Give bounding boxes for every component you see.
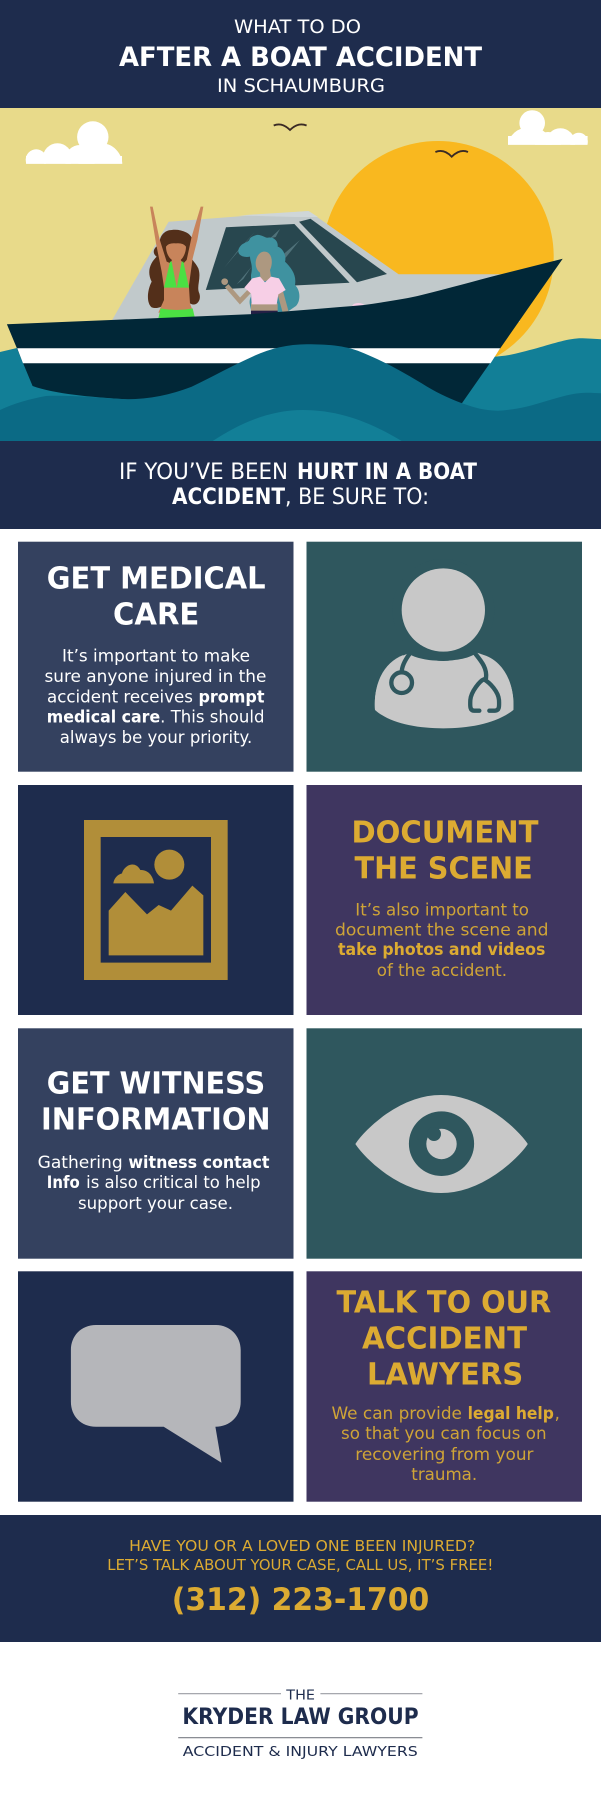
heading: get medical care: GET MEDICAL [47,561,266,596]
icon: speech bubble [71,1325,241,1463]
heading: document the scene: DOCUMENT [352,816,539,851]
text: lawyers body: trauma. [411,1465,477,1484]
text: witness body: witness contact [128,1153,270,1172]
heading: get witness information: GET WITNESS [47,1066,265,1101]
text: medical care body: prompt [198,687,265,706]
text: document body: take photos and videos [338,940,545,959]
bottom wave [213,410,402,441]
icon: eye [356,1096,527,1192]
title banner: IN SCHAUMBURG [217,76,385,97]
panel: eye icon [306,1028,582,1259]
heading: talk to our accident lawyers: TALK TO OUR [336,1285,551,1320]
section heading: IF YOU’VE BEEN [119,460,288,485]
text: witness body: support your case. [78,1194,233,1213]
boat cabin [111,211,520,322]
heading: get medical care: CARE [113,597,199,632]
text: witness body [38,1153,270,1213]
logo: the kryder law group: THE [285,1687,315,1703]
title banner: WHAT TO DO [234,17,361,38]
text: medical care body: medical care [47,708,160,727]
panel: document the scene [306,785,582,1015]
text: lawyers body: We can provide [332,1404,462,1423]
panel: get witness information [18,1028,294,1259]
section heading: ACCIDENT [172,485,285,510]
heading: get witness information [41,1066,271,1137]
heading: talk to our accident lawyers [336,1285,551,1392]
panel: doctor icon [306,542,582,772]
heading: document the scene: THE SCENE [354,852,533,887]
heading: document the scene [352,816,539,887]
section heading: HURT IN A BOAT [297,460,477,485]
heading: get witness information: INFORMATION [41,1102,271,1137]
logo: the kryder law group: KRYDER LAW GROUP [182,1705,419,1730]
hull white stripe [17,348,500,363]
text: document body: document the scene and [335,920,548,939]
text: medical care body: sure anyone injured in the [44,667,266,686]
text: lawyers body [332,1404,560,1484]
icon: bird right [435,151,468,157]
heading: talk to our accident lawyers: ACCIDENT [362,1321,528,1356]
text: document body: of the accident. [377,961,507,980]
woman in pink shirt [221,235,299,315]
illustration: boat at sunset [0,108,601,441]
icon: left cloud [26,121,122,164]
text: document body: It’s also important to [355,900,529,919]
logo: the kryder law group [178,1687,422,1760]
call to action banner: LET’S TALK ABOUT YOUR CASE, CALL US, IT’S FREE! [107,1556,493,1574]
icon: sun [322,141,554,372]
text: lawyers body: legal help [468,1404,554,1423]
text: medical care body: always be your priority. [60,728,252,747]
text: medical care body [44,646,266,747]
text: lawyers body: , [555,1404,560,1423]
text: witness body: Gathering [38,1153,123,1172]
panel: talk to our accident lawyers [306,1271,582,1502]
section heading: , BE SURE TO: [285,485,429,510]
panel: speech bubble icon [18,1271,294,1502]
boat hull [7,259,563,403]
section heading [0,441,601,529]
panel: get medical care [18,542,294,772]
panel: photo icon [18,785,294,1015]
front wave [0,344,601,441]
text: witness body: Info [47,1173,80,1192]
heading: get medical care [47,561,266,632]
text: lawyers body: so that you can focus on [341,1424,547,1443]
title banner [0,0,601,108]
logo: the kryder law group: ACCIDENT & INJURY LAWYERS [183,1744,418,1760]
icon: bird left [274,124,307,130]
text: medical care body: . This should [160,708,264,727]
call to action banner [0,1515,601,1642]
text: medical care body: accident receives [47,687,193,706]
title banner: AFTER A BOAT ACCIDENT [119,42,482,73]
phone number: (312) 223-1700 [172,1582,429,1618]
icon: doctor with stethoscope [375,559,513,728]
text: lawyers body: recovering from your [355,1445,534,1464]
icon: framed picture [84,820,228,980]
woman in green bikini [148,207,203,318]
call to action banner: HAVE YOU OR A LOVED ONE BEEN INJURED? [129,1537,475,1555]
icon: right cloud [508,110,588,145]
back wave [0,338,601,441]
heading: talk to our accident lawyers: LAWYERS [367,1357,523,1392]
text: document body [335,900,548,980]
text: witness body: is also critical to help [86,1173,261,1192]
text: medical care body: It’s important to make [62,646,250,665]
